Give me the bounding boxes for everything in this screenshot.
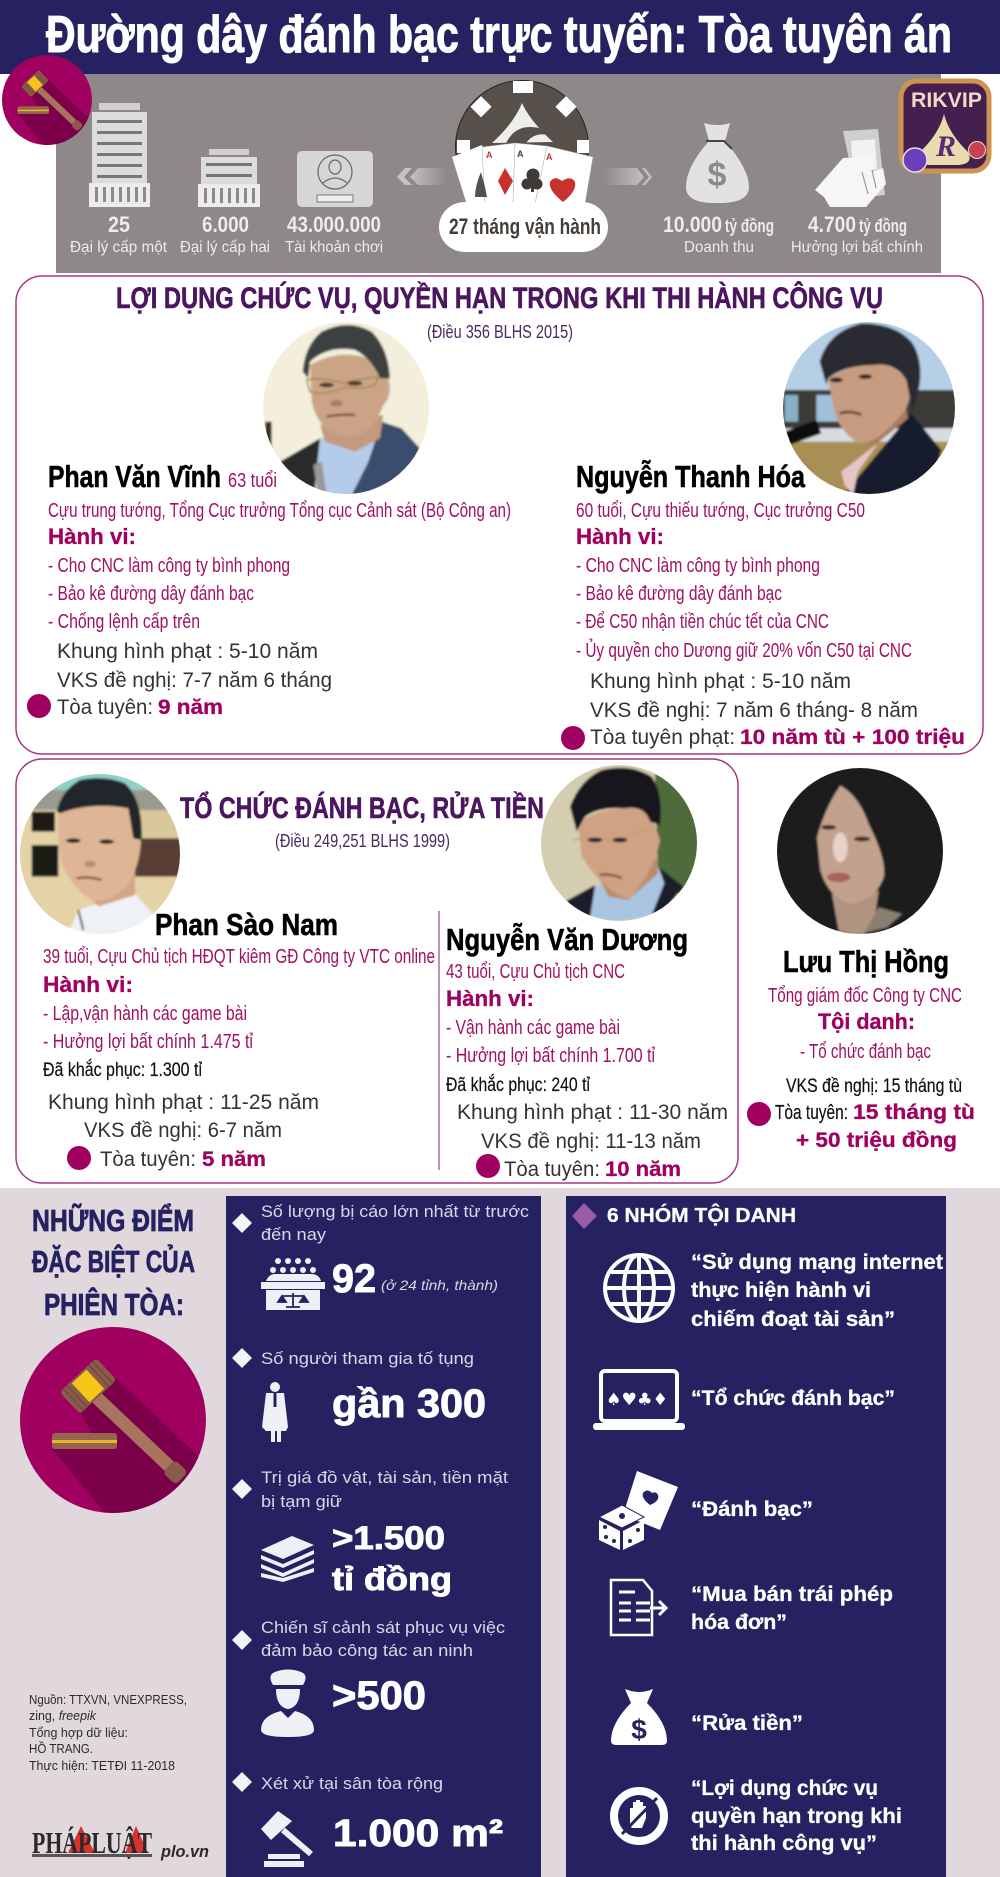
stat: accounts: 43.000.000 bbox=[287, 212, 381, 237]
charge: invoices: hóa đơn” bbox=[691, 1611, 787, 1634]
credits: HỒ TRANG. bbox=[29, 1741, 93, 1756]
person: Phan Văn Vĩnh: 63 tuổi bbox=[228, 470, 277, 492]
icon: casino chip and cards: A bbox=[517, 149, 524, 159]
person: Phan Sào Nam: Khung hình phạt : 11-25 năm bbox=[48, 1091, 319, 1114]
fact: courtyard size: 1.000 m² bbox=[333, 1813, 503, 1855]
person: Phan Văn Vĩnh: - Cho CNC làm công ty bình phong bbox=[48, 555, 290, 577]
fact: police officers: >500 bbox=[332, 1674, 426, 1718]
icon: casino chip and cards bbox=[452, 80, 593, 214]
person: Phan Sào Nam: Đã khắc phục: 1.300 tỉ bbox=[43, 1059, 203, 1081]
person: Nguyễn Thanh Hóa: Khung hình phạt : 5-10 năm bbox=[590, 670, 851, 693]
charge: internet fraud: chiếm đoạt tài sản” bbox=[691, 1308, 895, 1331]
icon: short building bbox=[198, 149, 260, 207]
fact: seized assets bbox=[232, 1468, 508, 1597]
credits: Tổng hợp dữ liệu: bbox=[29, 1725, 128, 1740]
photo: Phan Văn Vĩnh bbox=[263, 322, 429, 494]
stat: illicit gains: tỷ đồng bbox=[859, 216, 907, 236]
heading bbox=[572, 1203, 796, 1229]
person: Nguyễn Văn Dương: 43 tuổi, Cựu Chủ tịch CNC bbox=[446, 961, 625, 983]
person: Nguyễn Thanh Hóa bbox=[561, 459, 965, 750]
divider bbox=[438, 911, 440, 1170]
person: Phan Văn Vĩnh: Cựu trung tướng, Tổng Cục trưởng Tổng cục Cảnh sát (Bộ Công an) bbox=[48, 500, 511, 522]
person: Phan Sào Nam: Hành vi: bbox=[43, 972, 133, 997]
person: Nguyễn Văn Dương: Hành vi: bbox=[446, 986, 534, 1011]
person: Phan Văn Vĩnh: VKS đề nghị: 7-7 năm 6 tháng bbox=[57, 669, 332, 692]
stat: accounts: Tài khoản chơi bbox=[285, 239, 383, 256]
person: Phan Văn Vĩnh: Phan Văn Vĩnh bbox=[48, 459, 221, 494]
charge: abuse of office: “Lợi dụng chức vụ bbox=[691, 1777, 878, 1800]
person: Nguyễn Văn Dương: Nguyễn Văn Dương bbox=[446, 922, 688, 957]
fact: police officers: đảm bảo công tác an ninh bbox=[261, 1641, 473, 1660]
credits: Nguồn: TTXVN, VNEXPRESS, bbox=[29, 1692, 187, 1707]
legal reference: (Điều 356 BLHS 2015) bbox=[427, 322, 573, 342]
person: Phan Sào Nam: - Lập,vận hành các game bài bbox=[43, 1003, 247, 1025]
icon: casino chip and cards: A bbox=[546, 152, 553, 162]
person: Nguyễn Văn Dương: - Hưởng lợi bất chính 1.700 tỉ bbox=[446, 1045, 655, 1067]
person: Phan Văn Vĩnh: Tòa tuyên: bbox=[57, 696, 153, 719]
fact: seized assets: bị tạm giữ bbox=[261, 1492, 342, 1511]
icon: hand holding cash bbox=[815, 129, 886, 207]
stat: first-level agents: Đại lý cấp một bbox=[70, 239, 168, 256]
logo: Rikvip: R bbox=[935, 130, 956, 163]
person: Nguyễn Văn Dương: 10 năm bbox=[605, 1158, 681, 1181]
stat: illicit gains: Hưởng lợi bất chính bbox=[791, 239, 923, 256]
charge: organizing gambling: “Tổ chức đánh bạc” bbox=[691, 1387, 895, 1410]
person: Lưu Thị Hồng: - Tổ chức đánh bạc bbox=[800, 1041, 931, 1063]
charge: abuse of office: thi hành công vụ” bbox=[691, 1832, 877, 1855]
person: Nguyễn Thanh Hóa: - Cho CNC làm công ty bình phong bbox=[576, 555, 820, 577]
logo: Pháp Luật: plo.vn bbox=[160, 1842, 209, 1861]
person: Phan Sào Nam bbox=[43, 907, 435, 1171]
credits: Thực hiện: TETĐI 11-2018 bbox=[29, 1758, 175, 1773]
person: Nguyễn Văn Dương: Đã khắc phục: 240 tỉ bbox=[446, 1074, 591, 1096]
stat: second-level agents: 6.000 bbox=[202, 212, 249, 237]
stat: revenue bbox=[663, 212, 774, 256]
person: Nguyễn Thanh Hóa: - Để C50 nhận tiền chúc tết của CNC bbox=[576, 611, 829, 633]
fact: number of defendants: 92 bbox=[332, 1257, 376, 1301]
charge: gambling bbox=[599, 1471, 813, 1550]
stat: first-level agents bbox=[70, 212, 168, 256]
person: Lưu Thị Hồng: VKS đề nghị: 15 tháng tù bbox=[786, 1076, 962, 1097]
icon: tall building bbox=[89, 103, 150, 207]
charge: invoices bbox=[611, 1580, 893, 1635]
credits: zing, freepik bbox=[29, 1708, 97, 1723]
person: Phan Văn Vĩnh: 9 năm bbox=[158, 696, 223, 719]
heading: special points of the trial bbox=[32, 1202, 195, 1322]
logo: Pháp Luật: PHÁPLUẬT bbox=[32, 1825, 152, 1860]
charge: abuse of office bbox=[614, 1777, 902, 1855]
fact: police officers: Chiến sĩ cảnh sát phục vụ việc bbox=[261, 1618, 506, 1637]
logo: Rikvip: RIKVIP bbox=[911, 89, 982, 112]
panel: six groups of charges bbox=[566, 1196, 946, 1877]
stat: illicit gains bbox=[791, 212, 923, 256]
person: Phan Sào Nam: Tòa tuyên: bbox=[100, 1148, 196, 1171]
charge: money laundering bbox=[611, 1689, 803, 1745]
arrow: right bbox=[603, 168, 652, 185]
section background: trial highlights bbox=[0, 1188, 1000, 1877]
fact: number of defendants: (ở 24 tỉnh, thành) bbox=[381, 1277, 498, 1293]
icon: money bag bbox=[686, 123, 749, 203]
stat: illicit gains: 4.700 bbox=[808, 212, 856, 237]
fact: participants: Số người tham gia tố tụng bbox=[261, 1349, 474, 1368]
credits bbox=[29, 1692, 187, 1773]
callout: 27 months of operation bbox=[439, 202, 608, 252]
panel: trial facts bbox=[226, 1196, 541, 1877]
fact: number of defendants: đến nay bbox=[261, 1225, 327, 1244]
person: Phan Văn Vĩnh: - Chống lệnh cấp trên bbox=[48, 611, 200, 633]
fact: participants: gần 300 bbox=[332, 1382, 486, 1426]
person: Phan Văn Vĩnh: - Bảo kê đường dây đánh bạc bbox=[48, 583, 254, 605]
person: Phan Sào Nam: Phan Sào Nam bbox=[155, 907, 338, 942]
person: Nguyễn Thanh Hóa: VKS đề nghị: 7 năm 6 tháng- 8 năm bbox=[590, 699, 918, 722]
charge: abuse of office: quyền hạn trong khi bbox=[691, 1805, 902, 1828]
person: Nguyễn Thanh Hóa: - Bảo kê đường dây đánh bạc bbox=[576, 583, 782, 605]
person: Lưu Thị Hồng: 15 tháng tù bbox=[853, 1101, 975, 1124]
fact: number of defendants: Số lượng bị cáo lớn nhất từ trước bbox=[261, 1202, 530, 1221]
panel: organizing gambling, money laundering bbox=[12, 757, 738, 1183]
arrow: left bbox=[397, 168, 446, 185]
icon: account card bbox=[297, 151, 373, 207]
fact: seized assets: Trị giá đồ vật, tài sản, tiền mặt bbox=[261, 1468, 508, 1487]
charge: money laundering: $ bbox=[631, 1714, 647, 1745]
person: Lưu Thị Hồng: Tội danh: bbox=[818, 1009, 915, 1034]
photo: Lưu Thị Hồng bbox=[777, 768, 943, 934]
person: Nguyễn Thanh Hóa: 10 năm tù + 100 triệu bbox=[740, 726, 965, 749]
person: Nguyễn Văn Dương: Tòa tuyên: bbox=[504, 1158, 600, 1181]
fact: seized assets: tỉ đồng bbox=[332, 1561, 452, 1597]
charge: internet fraud: “Sử dụng mạng internet bbox=[691, 1251, 943, 1274]
charge: invoices: “Mua bán trái phép bbox=[691, 1583, 893, 1606]
person: Phan Văn Vĩnh bbox=[27, 459, 511, 719]
person: Phan Sào Nam: - Hưởng lợi bất chính 1.475 tỉ bbox=[43, 1031, 253, 1053]
stat: first-level agents: 25 bbox=[108, 212, 130, 237]
fact: police officers bbox=[232, 1618, 506, 1737]
stat: accounts bbox=[285, 212, 383, 256]
charge: money laundering: “Rửa tiền” bbox=[691, 1712, 803, 1735]
charge: organizing gambling: ♠♥♣♦ bbox=[606, 1390, 668, 1410]
photo: Phan Sào Nam bbox=[20, 774, 180, 934]
person: Phan Sào Nam: 5 năm bbox=[202, 1148, 266, 1171]
person: Phan Văn Vĩnh: Hành vi: bbox=[48, 524, 136, 549]
stat: revenue: Doanh thu bbox=[684, 239, 754, 256]
person: Nguyễn Thanh Hóa: Nguyễn Thanh Hóa bbox=[576, 459, 806, 494]
heading: special points of the trial: NHỮNG ĐIỂM bbox=[32, 1202, 194, 1238]
stat: second-level agents bbox=[180, 212, 270, 256]
person: Lưu Thị Hồng: Tòa tuyên: bbox=[775, 1102, 848, 1124]
charge: internet fraud bbox=[605, 1251, 943, 1331]
person: Nguyễn Văn Dương: VKS đề nghị: 11-13 năm bbox=[481, 1130, 701, 1153]
fact: courtyard size: Xét xử tại sân tòa rộng bbox=[261, 1774, 443, 1793]
logo: Rikvip bbox=[901, 81, 989, 172]
icon: money bag: $ bbox=[708, 156, 727, 194]
panel: abuse of office bbox=[16, 276, 983, 754]
charge: internet fraud: thực hiện hành vi bbox=[691, 1279, 871, 1302]
icon: gavel badge bbox=[2, 55, 100, 156]
heading: special points of the trial: PHIÊN TÒA: bbox=[44, 1286, 184, 1322]
charge: gambling: “Đánh bạc” bbox=[691, 1498, 813, 1521]
fact: courtyard size bbox=[232, 1772, 503, 1867]
person: Phan Văn Vĩnh: Khung hình phạt : 5-10 năm bbox=[57, 640, 318, 663]
heading: TỔ CHỨC ĐÁNH BẠC, RỬA TIỀN bbox=[180, 791, 544, 825]
charge: organizing gambling bbox=[593, 1371, 895, 1430]
panel: key figures bbox=[56, 74, 941, 273]
person: Lưu Thị Hồng bbox=[747, 944, 975, 1152]
person: Lưu Thị Hồng: + 50 triệu đồng bbox=[796, 1129, 957, 1152]
fact: participants bbox=[232, 1348, 486, 1442]
person: Nguyễn Văn Dương: Khung hình phạt : 11-30 năm bbox=[457, 1101, 728, 1124]
stat: revenue: tỷ đồng bbox=[725, 216, 774, 236]
person: Phan Sào Nam: 39 tuổi, Cựu Chủ tịch HĐQT kiêm GĐ Công ty VTC online bbox=[43, 946, 435, 968]
person: Nguyễn Thanh Hóa: 60 tuổi, Cựu thiếu tướng, Cục trưởng C50 bbox=[576, 500, 865, 522]
person: Phan Sào Nam: VKS đề nghị: 6-7 năm bbox=[84, 1119, 282, 1142]
fact: number of defendants bbox=[232, 1202, 530, 1310]
person: Lưu Thị Hồng: Lưu Thị Hồng bbox=[783, 944, 949, 979]
photo: Nguyễn Văn Dương bbox=[541, 765, 697, 921]
person: Nguyễn Văn Dương: - Vận hành các game bài bbox=[446, 1017, 620, 1039]
icon: casino chip and cards: A bbox=[486, 150, 493, 160]
person: Nguyễn Thanh Hóa: Hành vi: bbox=[576, 524, 664, 549]
photo: Nguyễn Thanh Hóa bbox=[783, 322, 955, 494]
stat: second-level agents: Đại lý cấp hai bbox=[180, 239, 270, 256]
person: Nguyễn Văn Dương bbox=[446, 922, 728, 1181]
callout: 27 months of operation: 27 tháng vận hành bbox=[449, 214, 601, 239]
stat: revenue: 10.000 bbox=[663, 212, 722, 237]
icon: large gavel bbox=[20, 1327, 223, 1535]
heading: 6 NHÓM TỘI DANH bbox=[607, 1203, 796, 1227]
heading: special points of the trial: ĐẶC BIỆT CỦA bbox=[32, 1243, 195, 1279]
fact: seized assets: >1.500 bbox=[332, 1520, 445, 1556]
legal reference: (Điều 249,251 BLHS 1999) bbox=[275, 831, 450, 851]
person: Nguyễn Thanh Hóa: Tòa tuyên phạt: bbox=[590, 726, 735, 749]
